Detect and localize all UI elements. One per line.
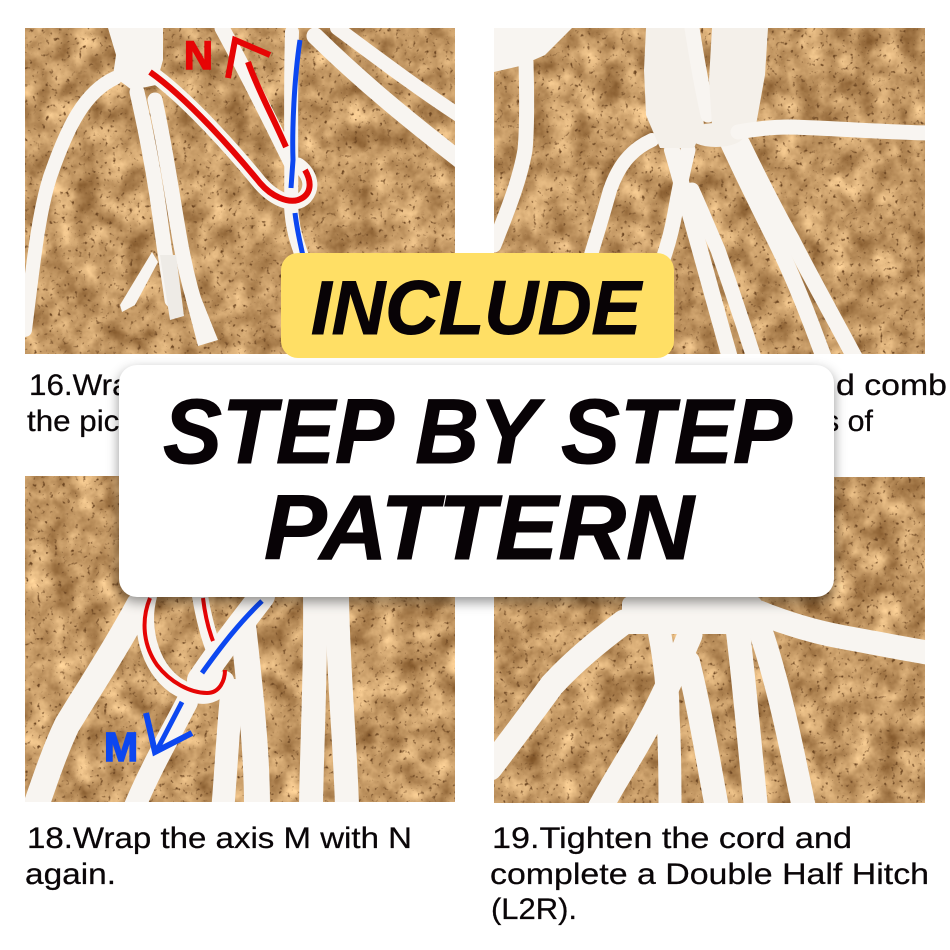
caption: step 18: 18.Wrap the axis M with N [27,822,412,855]
red arrow N [184,34,286,147]
caption: step 19 [490,822,929,926]
cords: step 19 [490,596,930,808]
caption: step 17: s of [824,405,874,438]
caption: step 17: d comb [836,369,947,402]
caption: step 16 [27,369,147,438]
label M: M [104,724,138,770]
panel: step 18 photo [25,476,455,806]
caption: step 19: 19.Tighten the cord and [492,822,852,855]
caption: step 18: again. [25,858,116,891]
caption: step 16: the pick [27,405,136,438]
caption: step 18 [25,822,412,891]
caption: step 17 [824,369,947,438]
red cord line: step 18 [145,598,225,693]
panel: step 19 photo [490,477,930,808]
heading: pattern: PATTERN [264,477,697,579]
cords: step 17 [494,28,930,358]
cords: step 18 [36,596,347,806]
heading: step by step: STEP BY STEP [163,381,793,483]
panel: step 17 photo [494,28,930,358]
blue arrow M [104,601,262,770]
panel: white title card [119,365,834,597]
panel: step 16 photo [25,28,460,354]
label N: N [184,34,213,78]
badge: include [281,253,674,358]
caption: step 19: complete a Double Half Hitch [490,858,929,891]
badge: include: INCLUDE [311,266,643,351]
cords: step 16 [25,28,460,346]
caption: step 16: 16.Wrap [29,369,147,402]
blue axis line: step 16 [291,40,303,256]
red cord line: step 16 [150,72,310,201]
caption: step 19: (L2R). [491,893,577,926]
